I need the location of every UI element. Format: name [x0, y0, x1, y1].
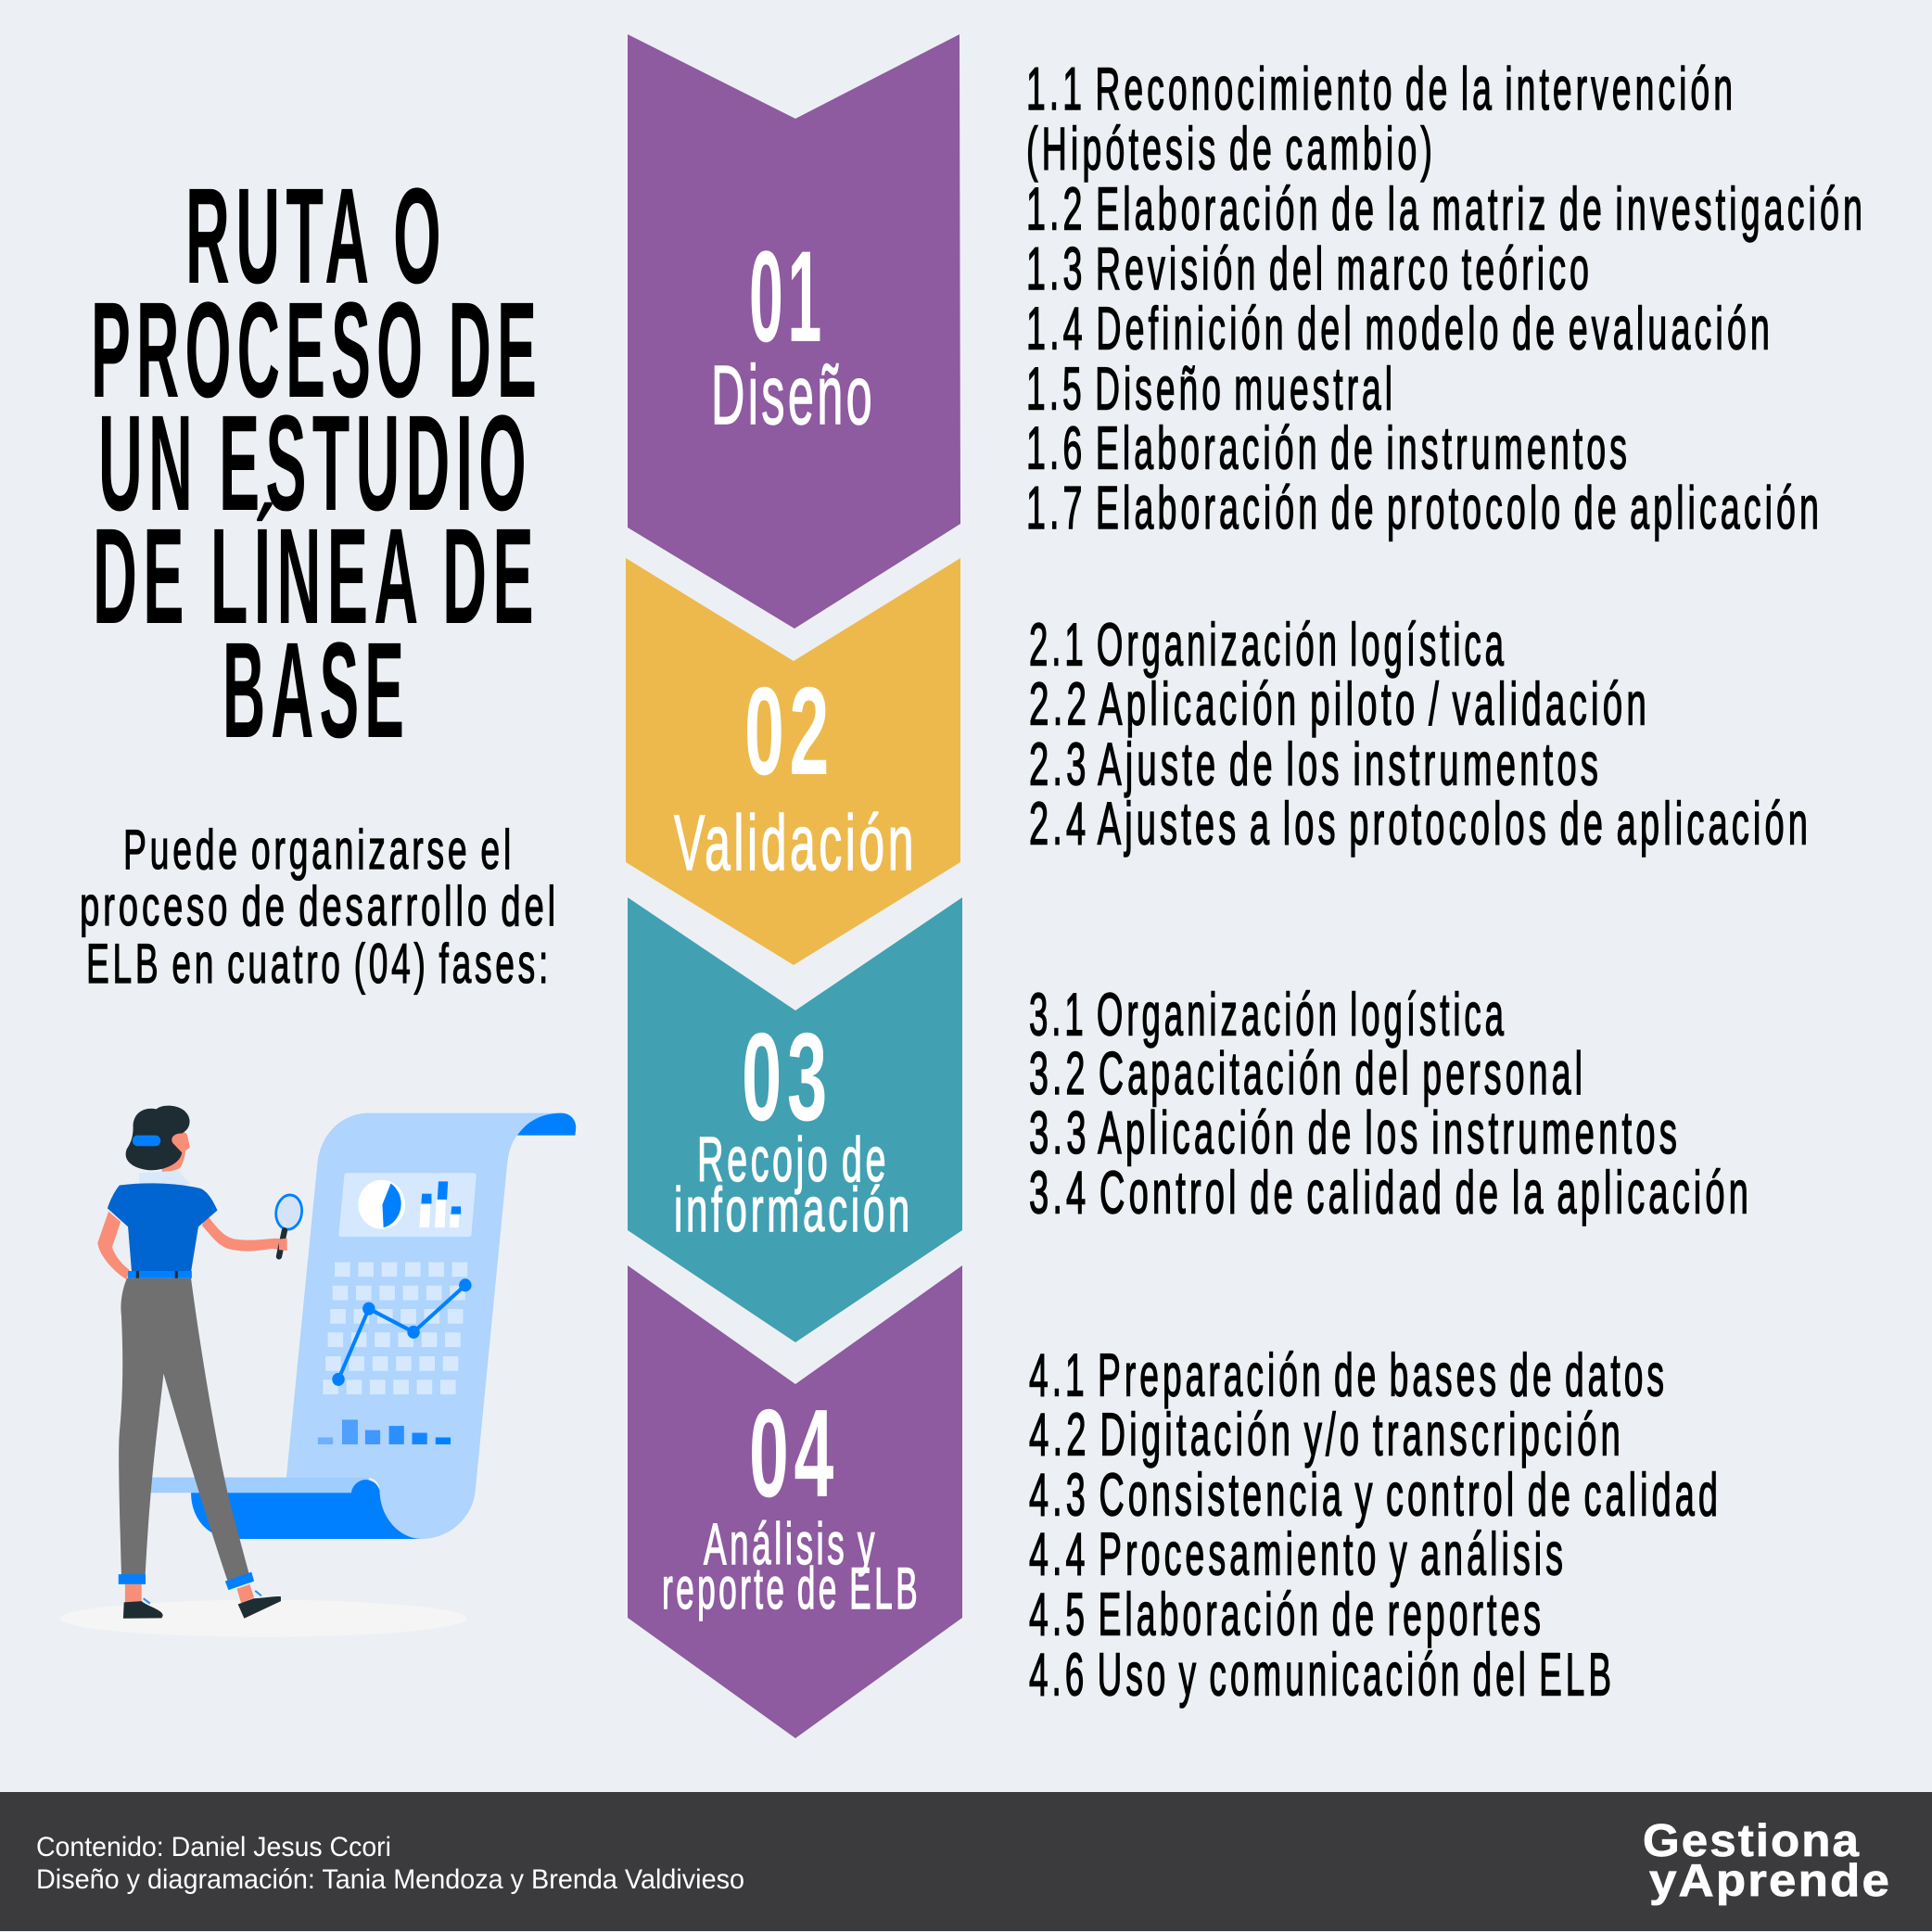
- phase 4 chevron: reporte de ELB: [662, 1557, 921, 1621]
- list: phase 4 steps: 4.4 Procesamiento y análisis: [1029, 1520, 1567, 1587]
- list: phase 1 steps: [1026, 55, 1866, 541]
- title: [91, 160, 542, 767]
- phase 2 chevron: Validación: [674, 799, 917, 886]
- list: phase 1 steps: 1.5 Diseño muestral: [1026, 354, 1396, 423]
- credits: Contenido: Daniel Jesus Ccori: [36, 1832, 391, 1862]
- title: RUTA O: [185, 160, 447, 312]
- credits: Diseño y diagramación: Tania Mendoza y Brenda Valdivieso: [36, 1864, 744, 1895]
- list: phase 1 steps: (Hipótesis de cambio): [1026, 115, 1436, 182]
- phase 3 chevron: información: [674, 1175, 913, 1245]
- intro text: ELB en cuatro (04) fases:: [86, 933, 552, 995]
- list: phase 4 steps: 4.5 Elaboración de reportes: [1029, 1580, 1544, 1648]
- list: phase 4 steps: [1029, 1341, 1722, 1708]
- credits: [36, 1832, 744, 1895]
- intro text: proceso de desarrollo del: [80, 875, 559, 937]
- icon: woman: [97, 1106, 304, 1619]
- phase 4 chevron: [628, 1265, 962, 1738]
- icon: data scroll: [149, 1113, 576, 1539]
- phase 3 chevron: [628, 897, 962, 1342]
- logo: yAprende: [1649, 1856, 1891, 1906]
- phase 4 chevron: Análisis y: [704, 1512, 878, 1577]
- phase 2 chevron: [626, 558, 960, 965]
- phase 4 chevron: 04: [749, 1383, 839, 1523]
- illustration: woman with magnifier and data scroll: [60, 1106, 576, 1637]
- phase 2 chevron: 02: [744, 661, 834, 801]
- infographic canvas: DE LÍNEA DE: [93, 501, 540, 653]
- infographic canvas: UN ESTUDIO: [98, 388, 532, 540]
- ground shadow: [60, 1600, 467, 1637]
- logo: Gestiona: [1643, 1816, 1861, 1866]
- footer band: [0, 1792, 1932, 1931]
- list: phase 2 steps: [1029, 610, 1811, 857]
- title: BASE: [222, 615, 410, 767]
- intro text: Puede organizarse el: [123, 819, 515, 881]
- intro text: [80, 819, 559, 995]
- phase 3 chevron: 03: [742, 1007, 833, 1147]
- phase 1 chevron: 01: [749, 223, 826, 369]
- phase 1 chevron: Diseño: [711, 350, 875, 442]
- infographic canvas: PROCESO DE: [91, 274, 542, 426]
- list: phase 3 steps: 3.1 Organización logística: [1029, 981, 1507, 1048]
- phase 3 chevron: Recojo de: [697, 1125, 889, 1195]
- logo: [1643, 1816, 1891, 1906]
- list: phase 3 steps: [1029, 981, 1752, 1226]
- list: phase 2 steps: 2.1 Organización logística: [1029, 610, 1507, 679]
- phase 1 chevron: [628, 34, 960, 629]
